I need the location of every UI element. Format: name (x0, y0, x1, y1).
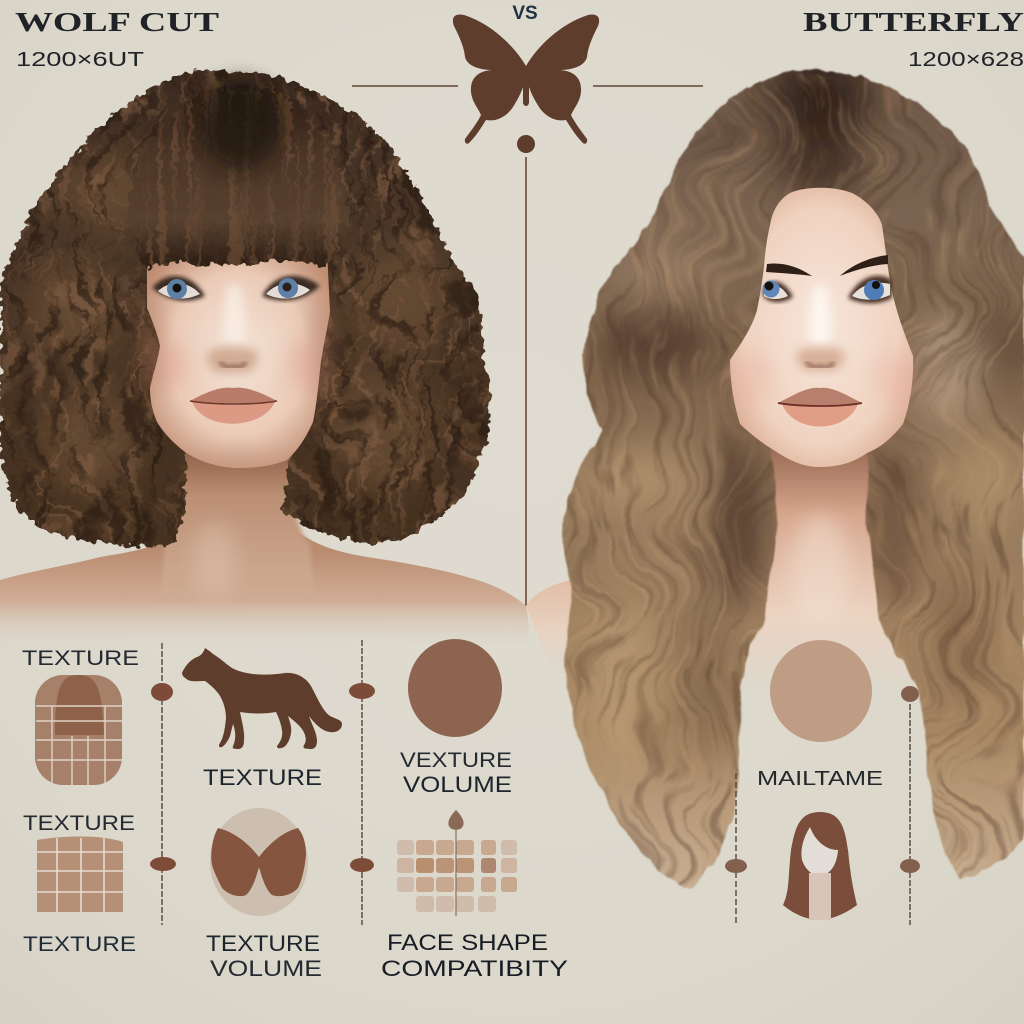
right hair part (818, 92, 822, 186)
right hair light strands (566, 72, 1024, 766)
divider dot (517, 135, 535, 153)
right hair shading (580, 55, 1024, 770)
left fringe (128, 84, 351, 271)
label: face shape: FACE SHAPE (387, 930, 548, 955)
divider line (525, 157, 527, 606)
left face (147, 250, 330, 468)
right eye one (762, 280, 793, 302)
right hair mass (555, 55, 1024, 900)
icon: square texture grid (37, 836, 123, 912)
rule right (593, 85, 703, 87)
left face side shading (140, 300, 334, 468)
label: texture under wolf: TEXTURE (203, 765, 322, 790)
right hair base (555, 60, 1024, 900)
dashed column divider one (161, 643, 163, 925)
woman: butterfly cut (526, 55, 1024, 900)
icon: butterfly in oval (210, 808, 308, 916)
label: texture bottom middle: TEXTURE (206, 931, 320, 956)
label: texture top left: TEXTURE (22, 647, 139, 670)
label: vexture: VEXTURE (400, 749, 512, 772)
left eye two (262, 276, 320, 301)
left hair curl light (0, 60, 500, 560)
icon: circle right (770, 640, 872, 742)
center divider (517, 135, 535, 606)
left fringe base (128, 84, 351, 271)
label: volume one: VOLUME (403, 772, 512, 797)
left crown part shadow (198, 80, 282, 170)
left fringe streaks (132, 84, 342, 270)
header: wolf cut title (15, 7, 219, 71)
icon: long hair face (783, 812, 857, 920)
right neck (735, 440, 925, 690)
dashed column divider two (361, 640, 363, 925)
left hair curl dark (0, 60, 500, 560)
right cheek blush (732, 350, 915, 406)
label: texture bottom left: TEXTURE (23, 933, 136, 956)
left cheek blush (154, 341, 321, 389)
header rule lines (352, 85, 703, 87)
left hair mass (0, 60, 500, 560)
right nose (797, 285, 844, 371)
left eye one (152, 276, 205, 301)
title: wolf cut: WOLF CUT (15, 7, 219, 37)
subtitle: butterfly size: 1200×628 (908, 49, 1024, 71)
right hair dark strands (555, 60, 1024, 900)
marker blobs (150, 683, 920, 873)
vs label: VS (512, 3, 538, 24)
left neck highlight (193, 522, 237, 598)
icon: circle top (408, 639, 502, 737)
label: volume two: VOLUME (210, 956, 322, 981)
dashed column divider three (735, 773, 737, 925)
right neck highlight (790, 515, 850, 625)
label: compatibility: COMPATIBITY (381, 956, 568, 981)
left hair light patches (27, 150, 450, 495)
left hair base (0, 60, 500, 560)
icon: textured hair grid (35, 675, 122, 785)
label: texture middle left: TEXTURE (23, 812, 135, 835)
left lips (190, 388, 277, 424)
right shoulders (526, 578, 600, 690)
icon: swatch grid with pin (397, 810, 517, 916)
subtitle: wolf cut size: 1200×6UT (16, 49, 144, 71)
left neck (160, 440, 315, 600)
dashed column divider four (909, 704, 911, 925)
panel: comparison icons (22, 639, 920, 981)
icon: butterfly emblem (453, 15, 599, 144)
title: butterfly: BUTTERFLY (803, 7, 1024, 37)
icon: wolf silhouette (182, 648, 342, 749)
header: butterfly title (803, 7, 1024, 71)
right face (730, 188, 913, 467)
right brows (766, 255, 888, 276)
left nose (207, 285, 258, 373)
rule left (352, 85, 458, 87)
woman: wolf cut (0, 60, 529, 655)
right eye two (848, 276, 892, 303)
right lips (778, 388, 862, 426)
left shoulders (0, 530, 529, 655)
label: maintame: MAILTAME (757, 768, 883, 790)
